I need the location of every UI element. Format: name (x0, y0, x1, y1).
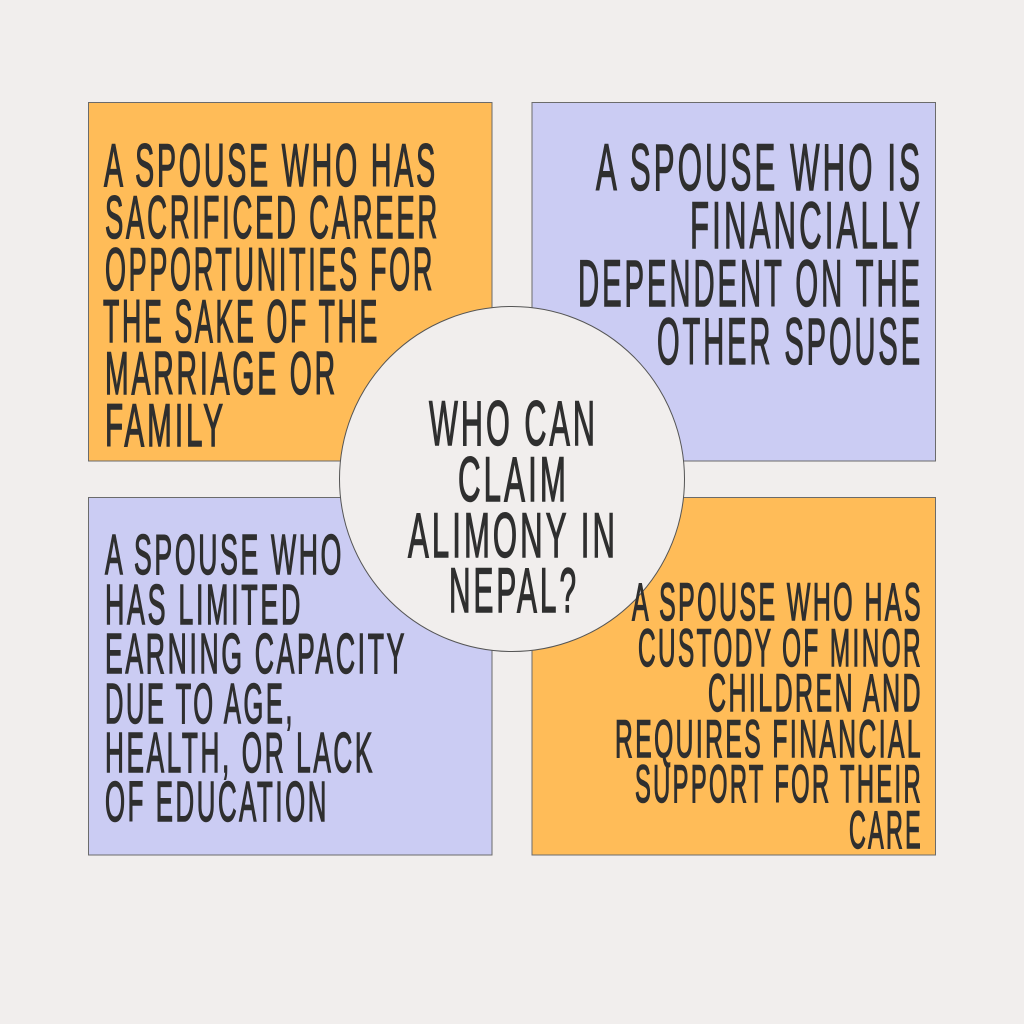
text: OPPORTUNITIES FOR (105, 236, 435, 303)
panel: top-left orange (88, 102, 492, 461)
text block: bottom-left panel: HAS LIMITED (105, 573, 303, 637)
title: center circle heading: NEPAL? (449, 556, 579, 626)
text block: bottom-right panel (615, 573, 923, 860)
text block: bottom-left panel: HEALTH, OR LACK (105, 721, 375, 785)
text block: top-left panel (103, 132, 440, 459)
text: A SPOUSE WHO HAS (104, 132, 438, 199)
text block: bottom-left panel: A SPOUSE WHO (105, 523, 344, 587)
text block: top-right panel (578, 130, 923, 378)
title: center circle heading: CLAIM (458, 445, 569, 515)
panel: bottom-left lavender (88, 498, 492, 855)
center circle (340, 306, 684, 652)
text: SACRIFICED CAREER (105, 184, 440, 251)
panel: top-right lavender (532, 102, 936, 461)
text block: bottom-left panel: OF EDUCATION (105, 770, 329, 834)
text block: bottom-left panel: DUE TO AGE, (105, 672, 295, 736)
text: ALIMONY IN (408, 501, 618, 571)
panel: bottom-right orange (532, 498, 936, 855)
text block: top-left panel: FAMILY (105, 392, 226, 459)
title: center circle heading: WHO CAN (429, 389, 598, 459)
text: CARE (849, 801, 923, 860)
text block: top-left panel: THE SAKE OF THE (103, 288, 380, 355)
title: center circle heading (408, 389, 618, 626)
text block: top-left panel: MARRIAGE OR (105, 340, 338, 407)
text: EARNING CAPACITY (105, 622, 407, 686)
text block: bottom-left panel (105, 523, 407, 834)
